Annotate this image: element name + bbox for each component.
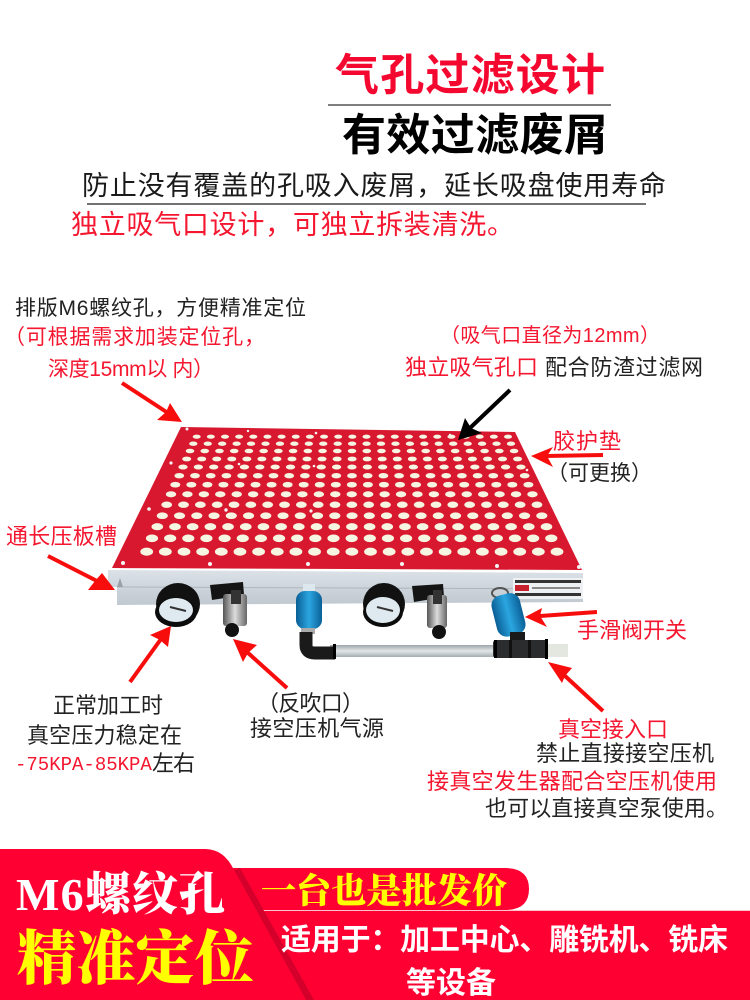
callout: vacuum pressure: 真空压力稳定在	[27, 723, 182, 748]
left red panel	[0, 849, 306, 1000]
pressure gauge left	[155, 583, 200, 627]
callout: rubber pad: （可更换）	[547, 462, 652, 485]
arrow: T-slot	[48, 556, 115, 590]
callout: suction port	[405, 324, 703, 380]
pressure gauge right	[363, 583, 405, 627]
arrow: vacuum inlet	[548, 662, 603, 711]
callout: M6 threaded holes: （可根据需求加装定位孔，	[4, 326, 265, 349]
label plate	[513, 578, 583, 599]
suction holes	[147, 437, 558, 552]
callout: blow-back port	[250, 691, 384, 741]
callout: vacuum pressure: 正常加工时	[53, 693, 163, 718]
callout: suction port: 配合防渣过滤网	[545, 355, 703, 380]
second ball valve	[412, 584, 447, 639]
arrow: suction port	[458, 390, 510, 440]
red description line: 独立吸气口设计，可独立拆装清洗。	[71, 210, 514, 240]
blue slide valve left with elbow	[296, 584, 336, 659]
arrow: rubber pad	[531, 447, 603, 467]
callout: T-slot: 通长压板槽	[6, 524, 117, 549]
description line: 防止没有覆盖的孔吸入废屑，延长吸盘使用寿命	[82, 171, 666, 201]
arrow: slide valve	[525, 608, 597, 627]
callout: vacuum inlet: 接真空发生器配合空压机使用	[427, 769, 717, 794]
callout: rubber pad: 胶护垫	[553, 429, 621, 454]
applicable equipment text: 适用于：加工中心、雕铣机、铣床	[281, 924, 728, 957]
callout: vacuum pressure: 左右	[152, 751, 195, 776]
callout: M6 threaded holes	[4, 297, 306, 381]
red rubber top plate	[112, 427, 582, 570]
tee fitting	[493, 632, 548, 659]
arrow: M6 locating hole	[122, 383, 182, 422]
title: 气孔过滤设计	[335, 51, 605, 100]
arrow: pressure gauge	[130, 626, 171, 682]
callout: vacuum inlet: 也可以直接真空泵使用。	[485, 796, 728, 821]
footer banner	[0, 849, 750, 1000]
subtitle: 有效过滤废屑	[342, 111, 608, 160]
callout: vacuum inlet: 真空接入口	[558, 717, 668, 742]
heading: M6 threaded hole: M6螺纹孔	[16, 869, 225, 920]
panel edge shadow	[234, 868, 314, 1000]
callout: M6 threaded holes: 排版M6螺纹孔，方便精准定位	[15, 297, 306, 320]
callout: slide valve: 手滑阀开关	[577, 618, 687, 643]
M6 locating screw holes	[121, 428, 581, 569]
clear tube stub	[547, 644, 568, 657]
pill: wholesale price: 一台也是批发价	[261, 872, 507, 911]
applicable equipment text: 等设备	[406, 967, 496, 1000]
band: applicable equipment	[250, 910, 750, 1000]
callout: blow-back port: （反吹口）	[257, 691, 364, 716]
callout: rubber pad	[547, 429, 652, 485]
vacuum chuck product	[108, 427, 583, 659]
machine body	[108, 568, 583, 605]
callout: vacuum inlet	[427, 717, 728, 821]
callout: vacuum inlet: 禁止直接接空压机	[536, 741, 714, 766]
callout: suction port: （吸气口直径为12mm）	[440, 324, 660, 347]
blow-back ball valve	[210, 582, 247, 637]
callout: vacuum pressure	[15, 693, 195, 776]
heading: precise positioning: 精准定位	[17, 926, 254, 992]
arrow: blow-back port	[233, 639, 287, 688]
callout: blow-back port: 接空压机气源	[250, 716, 384, 741]
callout: M6 threaded holes: 深度15mm以 内）	[48, 358, 214, 381]
callout: suction port: 独立吸气孔口	[405, 355, 538, 380]
callout: vacuum pressure: -75KPA-85KPA	[15, 754, 152, 776]
applicable equipment text	[281, 924, 728, 1000]
vacuum tube	[330, 645, 495, 657]
blue slide valve right	[489, 588, 528, 639]
